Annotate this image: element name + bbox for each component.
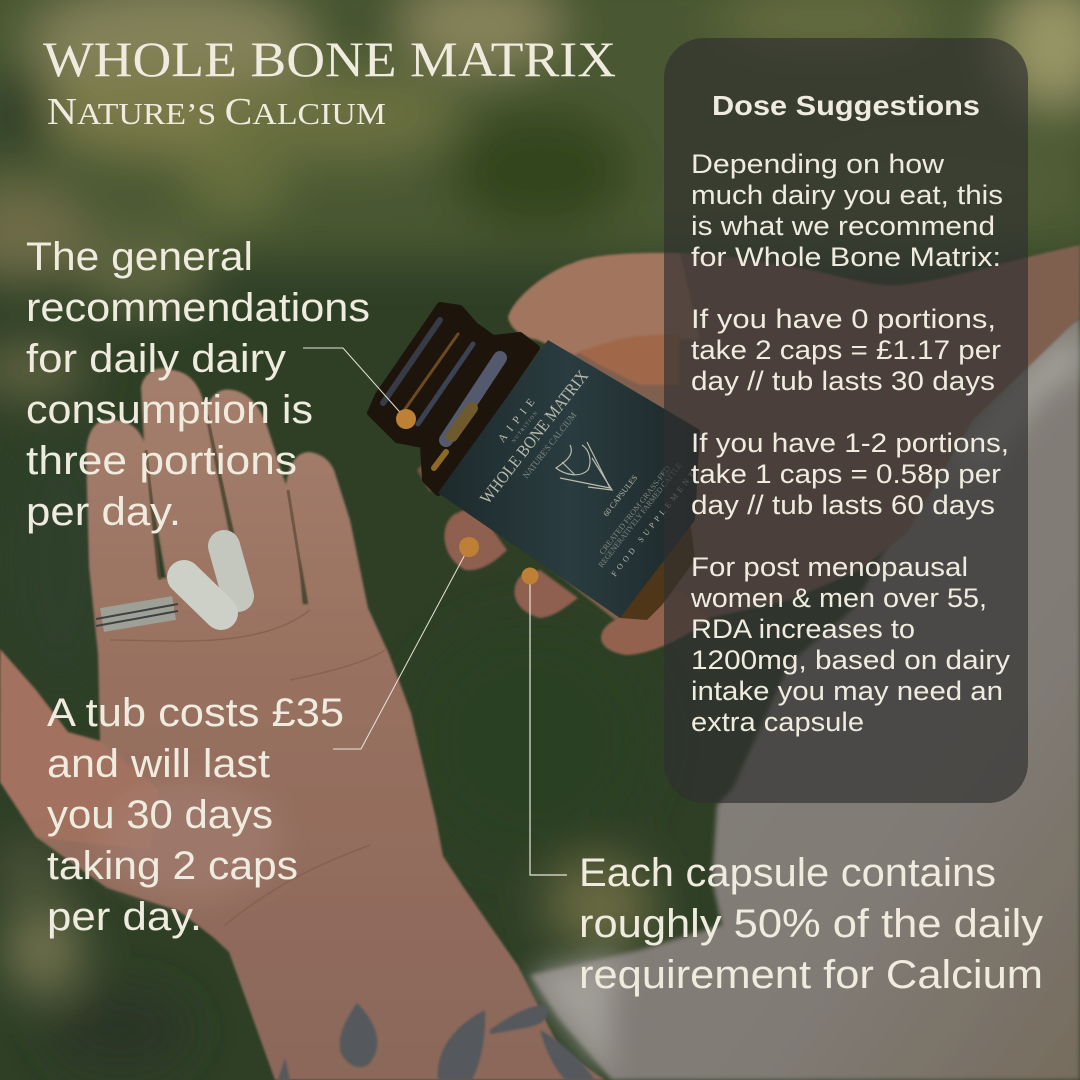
panel text: post menopausal: intake you may need an (691, 676, 1003, 706)
panel text: 0 portions: day // tub lasts 30 days (691, 366, 995, 396)
bottle base glass (620, 520, 695, 620)
bottle label (438, 340, 700, 618)
panel text: 0 portions (691, 304, 1001, 396)
title: WHOLE BONE MATRIX (43, 31, 616, 87)
panel: dose suggestions (664, 38, 1028, 803)
panel text: post menopausal: extra capsule (691, 707, 864, 737)
panel text: post menopausal: RDA increases to (691, 614, 915, 644)
arrow: tub cost pointer (333, 537, 479, 749)
bottle label text: AIPIE (496, 396, 538, 445)
subtitle: NATURE’S CALCIUM (47, 91, 386, 133)
callout: daily dairy recommendation: three portions (26, 439, 297, 483)
callout: daily dairy recommendation: recommendations (26, 286, 370, 330)
callout: daily dairy recommendation: consumption is (26, 388, 313, 432)
panel text: 1-2 portions (691, 428, 1009, 520)
callout: tub cost: and will last (47, 742, 270, 786)
panel text: 1-2 portions: day // tub lasts 60 days (691, 490, 995, 520)
panel text: post menopausal: For post menopausal (691, 552, 968, 582)
finger one (444, 505, 507, 570)
bottle label text: NUTRITION (512, 411, 539, 444)
finger gaps (146, 415, 306, 603)
photo: right hand holding bottle (417, 245, 1080, 655)
bottle label text: 60 CAPSULES (601, 473, 639, 518)
bottle label text: REGENERATIVELY FARMED CATTLE (596, 461, 684, 569)
finger three (601, 590, 710, 655)
panel text: intro (691, 149, 1003, 272)
callout: tub cost: you 30 days (47, 793, 273, 837)
arrow: dairy callout pointer (303, 348, 416, 429)
callout: daily dairy recommendation: per day. (26, 490, 181, 534)
panel text: post menopausal: women & men over 55, (690, 583, 987, 613)
bottle label text (476, 367, 697, 578)
callout: capsule calcium: requirement for Calcium (579, 953, 1043, 997)
bottle glass (370, 305, 537, 493)
glass reflections (383, 320, 500, 468)
icon: capsule two (224, 546, 238, 596)
panel heading: Dose Suggestions (712, 90, 980, 121)
tattoos (278, 1003, 595, 1080)
icon: capsule one (184, 577, 221, 613)
panel text: 0 portions: If you have 0 portions, (691, 304, 996, 334)
photo: white shirt sleeve (530, 317, 1080, 1080)
bottle label text: NATURE'S CALCIUM (521, 410, 578, 480)
palm creases (110, 610, 385, 925)
bottle label text: CREATED FROM GRASS-FED (597, 464, 672, 556)
panel text: 1-2 portions: If you have 1-2 portions, (691, 428, 1009, 458)
arrow: capsule pointer (522, 568, 567, 875)
callout: tub cost: per day. (47, 895, 202, 939)
callout: capsule calcium: Each capsule contains (579, 851, 996, 895)
callout: tub cost (47, 691, 344, 939)
finger two (515, 570, 578, 618)
panel text: post menopausal (690, 552, 1011, 737)
panel text: intro: for Whole Bone Matrix: (691, 242, 1001, 272)
callout: capsule calcium: roughly 50% of the daily (579, 902, 1043, 946)
bottle label text: FOOD SUPPLEMENT (609, 470, 697, 578)
callout: capsule calcium (579, 851, 1043, 997)
bottle label text: WHOLE BONE MATRIX (476, 367, 592, 507)
icon: ring (96, 604, 178, 626)
callout: daily dairy recommendation (26, 235, 370, 534)
callout: tub cost: taking 2 caps (47, 844, 298, 888)
panel text: intro: is what we recommend (691, 211, 995, 241)
callout: daily dairy recommendation: The general (26, 235, 253, 279)
panel text: 1-2 portions: take 1 caps = 0.58p per (691, 459, 1001, 489)
callout: daily dairy recommendation: for daily dairy (26, 337, 286, 381)
panel text: 0 portions: take 2 caps = £1.17 per (691, 335, 1001, 365)
panel text: post menopausal: 1200mg, based on dairy (691, 645, 1011, 675)
photo: left hand with capsules (0, 368, 605, 1080)
photo: supplement bottle (370, 305, 700, 620)
callout: tub cost: A tub costs £35 (47, 691, 344, 735)
icon: bull head logo (556, 442, 612, 490)
panel text: intro: Depending on how (691, 149, 945, 179)
panel text: intro: much dairy you eat, this (691, 180, 1003, 210)
